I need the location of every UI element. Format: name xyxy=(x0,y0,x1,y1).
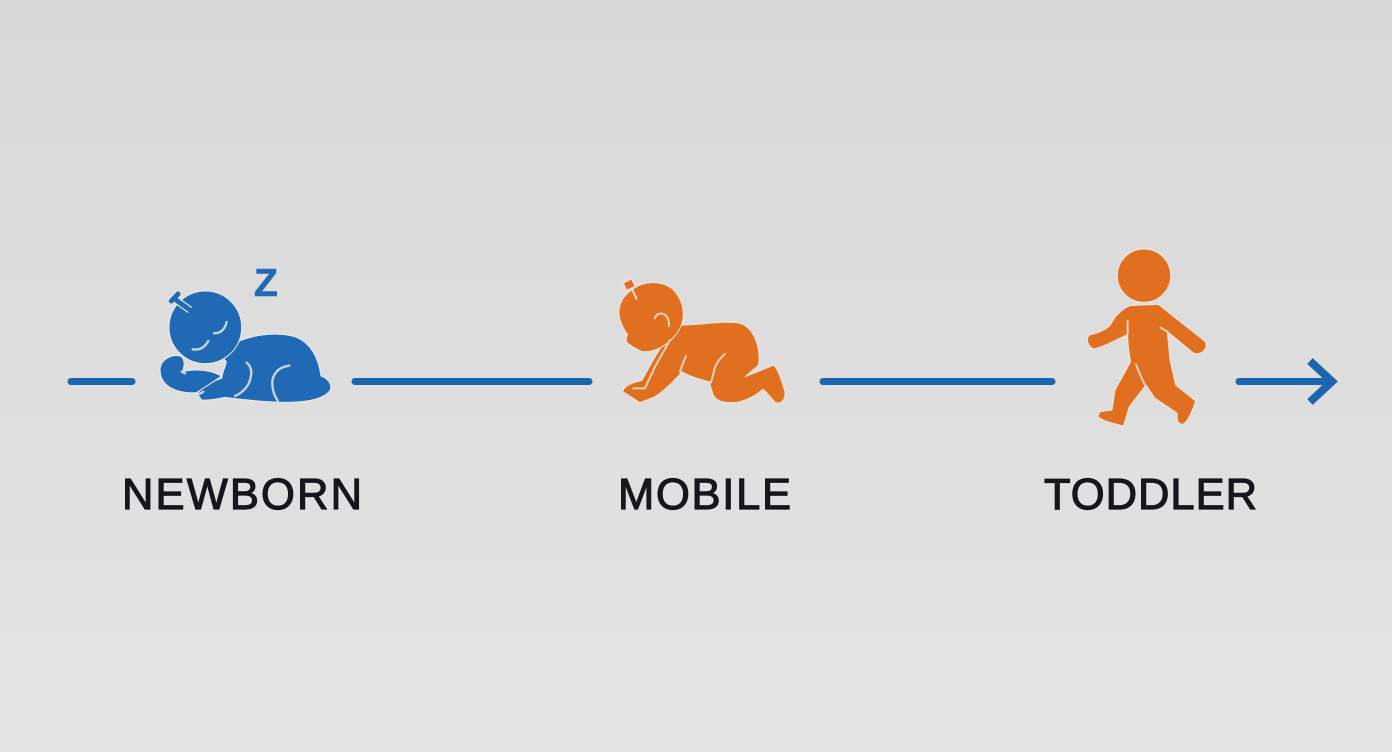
icon: sleeping newborn xyxy=(160,291,331,402)
timeline segment: mobile to toddler xyxy=(823,378,1052,385)
arrow: continuing development xyxy=(1239,361,1332,402)
icon: walking toddler xyxy=(1088,249,1206,426)
label: mobile: MOBILE xyxy=(618,471,791,519)
timeline segment: newborn to mobile xyxy=(355,378,589,385)
label: toddler: TODDLER xyxy=(1044,471,1257,519)
icon: crawling baby xyxy=(619,279,785,403)
timeline segment: lead-in xyxy=(71,378,132,385)
icon: sleep Z: Z xyxy=(254,262,278,305)
label: newborn: NEWBORN xyxy=(122,471,362,519)
